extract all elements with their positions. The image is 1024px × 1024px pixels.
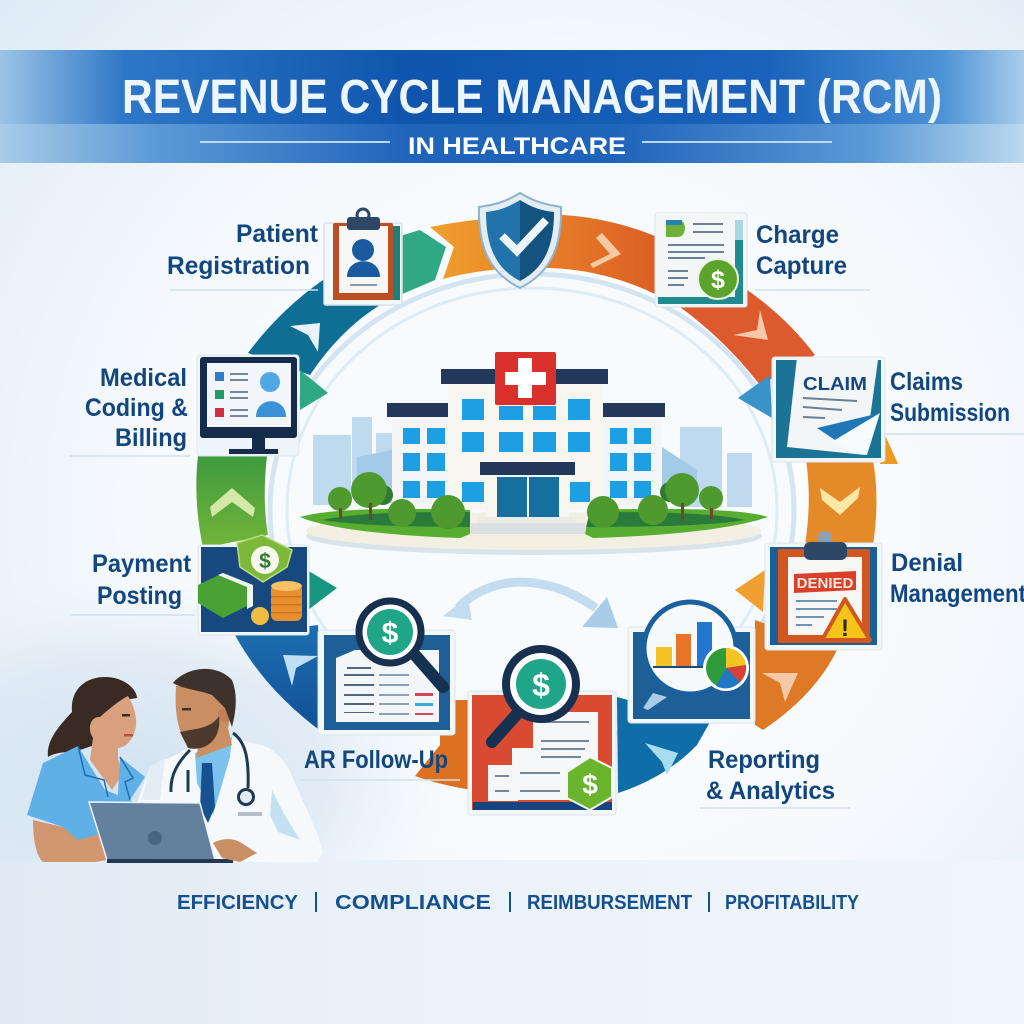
left wing [392,417,450,507]
inner ring outline [270,274,794,746]
ring segment: top-left green [400,230,446,295]
lawn [300,509,768,538]
label: claims submission [890,368,1010,427]
icon: audit document [468,649,616,815]
icon: audit document: $ [582,769,598,800]
label underlines [70,290,1024,808]
floor band [0,860,1024,1024]
ring segment: left green [196,456,268,548]
icon: medical coding computer [197,355,299,456]
icon: patient registration [324,209,402,305]
icon: payment posting: $ [259,550,271,573]
label: charge capture: Charge [756,221,839,249]
doctor [138,669,323,862]
icon: audit document: $ [532,667,550,703]
laptop [89,802,233,863]
icon: AR follow-up [318,601,455,735]
doctor hand [213,839,257,862]
icon: denial management: ! [841,615,849,642]
icon: payment posting [198,535,309,635]
label: denial management: Denial [891,549,963,577]
icon: claims submission: CLAIM [803,374,867,394]
ring segment: lower-right orange [755,620,837,730]
label: reporting and analytics: Reporting [708,746,820,774]
label: patient registration: Patient [236,220,319,248]
ring segment: top orange [430,215,655,294]
label: payment posting [92,550,192,610]
ring segment: lower-left blue [235,625,322,732]
icon: charge capture: $ [711,266,725,294]
red cross sign [495,352,556,405]
label: medical coding and billing: Medical [100,364,187,392]
main building [448,384,603,509]
entrance [486,475,569,520]
bottom keywords: PROFITABILITY [725,892,860,914]
bottom keywords: COMPLIANCE [335,892,491,914]
icon: charge capture [655,213,747,307]
nurse [27,677,145,862]
icon: shield [479,193,561,288]
bottom keywords: REIMBURSEMENT [527,892,692,914]
trees [328,472,723,529]
label: payment posting: Posting [97,582,182,610]
icon: reporting and analytics [628,602,755,723]
label: reporting and analytics: & Analytics [706,777,835,805]
label: medical coding and billing: Coding & [85,394,188,422]
ring segment: bottom blue [617,697,710,793]
label: claims submission: Claims [890,368,963,396]
title: REVENUE CYCLE MANAGEMENT (RCM) [122,71,942,124]
icon: claims submission [772,357,885,462]
label: medical coding and billing [85,364,188,452]
subtitle: IN HEALTHCARE [408,133,626,160]
title banner [0,50,1024,163]
label: charge capture [756,221,847,280]
cycle arrows [443,582,618,628]
label: reporting and analytics [706,746,835,805]
left tint behind people [0,560,450,960]
island base [306,517,762,555]
right wing [603,417,661,507]
people: nurse and doctor [27,669,323,863]
label: patient registration [167,220,319,280]
label: AR follow-up: AR Follow-Up [304,746,448,774]
label: denial management [890,549,1024,608]
windows [403,399,651,502]
icon: denial management [765,531,882,650]
bottom keywords: EFFICIENCY [177,892,299,914]
label: medical coding and billing: Billing [115,424,187,452]
icon: AR follow-up: $ [382,617,399,650]
icon: denial management: DENIED [797,575,853,592]
ring segment: right gold [805,460,876,545]
label: patient registration: Registration [167,252,310,280]
label: charge capture: Capture [756,252,847,280]
ring segment: upper-right red [680,285,815,385]
label: payment posting: Payment [92,550,192,578]
ring segment: upper-left teal [248,280,380,375]
skyline [313,417,752,507]
bottom keywords [177,892,860,914]
ring segment: bottom orange [415,700,472,790]
hospital scene [300,352,768,555]
cycle ring [196,215,877,793]
arrows on ring [210,233,898,775]
